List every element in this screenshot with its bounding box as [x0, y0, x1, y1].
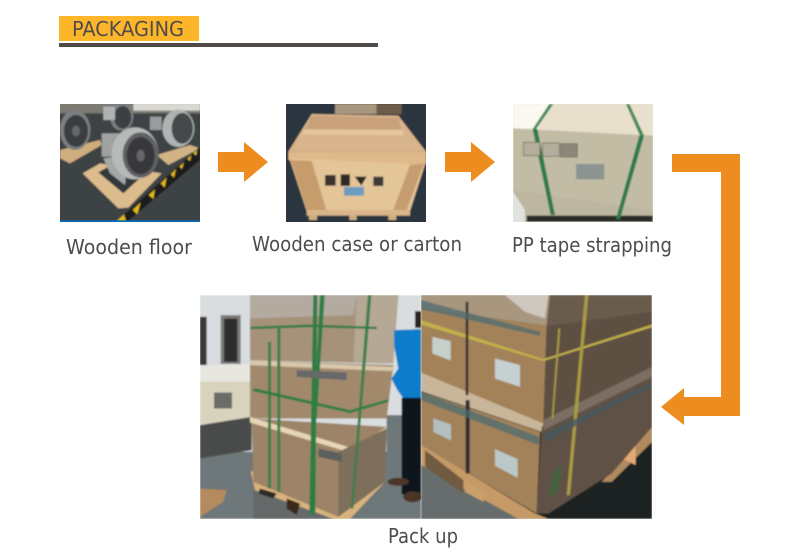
label: Wooden case or carton: Wooden case or carton — [252, 232, 462, 256]
label: Wooden floor: Wooden floor — [66, 235, 193, 259]
photo: stacked cartons on pallet — [421, 295, 652, 519]
arrow: floor to case — [218, 142, 268, 182]
label: Pack up: Pack up — [388, 524, 458, 548]
photo: PP tape strapping — [513, 104, 653, 222]
connector arrow: strapping down to pack up — [661, 154, 740, 425]
heading: PACKAGING: PACKAGING — [72, 17, 184, 41]
photo: wooden case — [286, 104, 426, 222]
arrow: case to strapping — [445, 142, 495, 182]
label: PP tape strapping: PP tape strapping — [512, 233, 672, 257]
photo: wrapped pallet with worker — [200, 295, 421, 519]
photo: blowers on wooden floors — [60, 104, 200, 222]
